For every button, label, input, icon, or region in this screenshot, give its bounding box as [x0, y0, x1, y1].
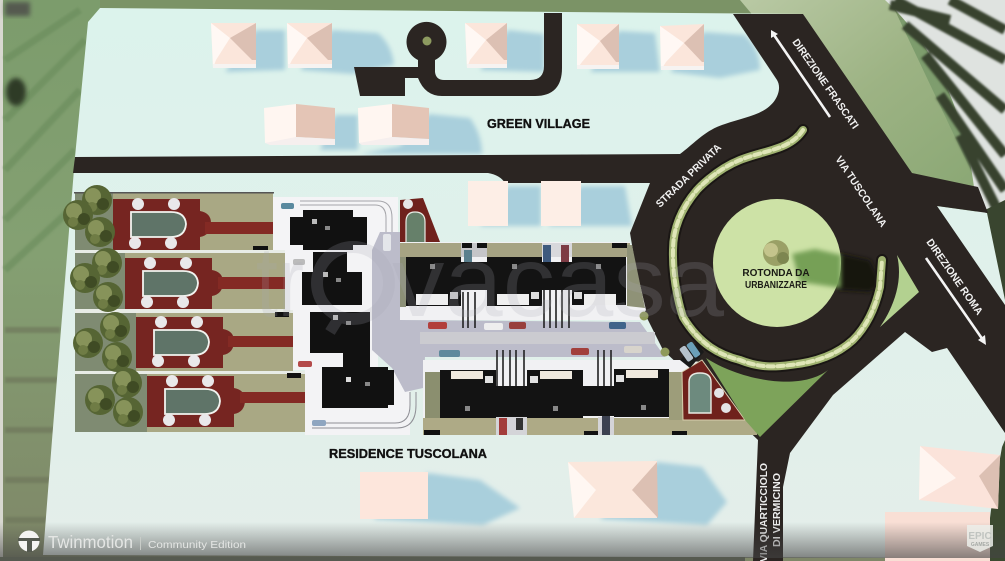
west roofs: [290, 210, 394, 408]
stairs: [463, 290, 569, 328]
house east 1: [919, 446, 1000, 509]
house 6: [264, 104, 335, 145]
bottom edge strip: [0, 557, 745, 561]
roundabout hedge: [673, 130, 882, 366]
north terrace block: [400, 242, 646, 328]
label: Rotonda da urbanizzare: ROTONDA DA: [742, 268, 810, 279]
label: Green Village: GREEN VILLAGE: [487, 116, 590, 131]
south-east corner pool: [682, 360, 745, 420]
road shadow of tree: [838, 253, 882, 292]
south terrace block: [423, 350, 757, 435]
south roofs: [440, 369, 669, 418]
house 5: [660, 24, 704, 70]
house east 2: [885, 512, 990, 561]
roundabout green centre: [713, 199, 841, 327]
label: Strada Privata: STRADA PRIVATA: [654, 142, 724, 210]
logo: Twinmotion: Community Edition: [148, 539, 246, 551]
roundabout centre tree spot: [422, 36, 432, 46]
green verge south of roundabout: [706, 358, 828, 437]
tree shadow on roundabout: [792, 249, 841, 288]
logo: Twinmotion: [18, 530, 246, 552]
house 2: [287, 23, 332, 68]
watermark: trovacasa: vacasa: [392, 226, 724, 338]
house south 1: [360, 472, 428, 519]
logo: Twinmotion: Twinmotion: [48, 532, 133, 552]
label: Via Quarticciolo di Vermicino: VIA QUARTICCIOLO: [758, 463, 770, 561]
cul-de-sac road Green Village: [354, 13, 562, 96]
north-east corner pool: [400, 198, 440, 258]
label: Rotonda da urbanizzare: [742, 268, 810, 291]
label: Rotonda da urbanizzare: URBANIZZARE: [745, 280, 807, 291]
logo: Epic Games badge: GAMES: [971, 542, 990, 548]
stairs: [497, 350, 611, 386]
house row: Green Village pyramids: [211, 23, 704, 226]
house shadows: [225, 30, 760, 525]
internal driveway: [372, 232, 665, 392]
small patios: [253, 246, 268, 250]
house south 2: [568, 461, 658, 518]
green wedge east of roundabout: [880, 255, 919, 327]
house 8: [468, 181, 508, 226]
house 1: [211, 23, 256, 68]
houses south: [360, 446, 1000, 561]
watermark: trovacasa: tr: [256, 226, 304, 338]
house 7: [358, 104, 429, 145]
bottom vignette: [0, 522, 1005, 558]
arrow: towards Roma: [926, 258, 986, 345]
garden row 2: [125, 257, 223, 309]
arrow: towards Frascati: [771, 30, 830, 117]
label: Residence Tuscolana: RESIDENCE TUSCOLANA: [329, 446, 488, 461]
trees along west boundary: [63, 185, 143, 427]
small trees at road edge: [640, 312, 670, 356]
label: Via Quarticciolo di Vermicino: DI VERMICINO: [771, 473, 783, 547]
roundabout tree: [763, 240, 789, 266]
house 3: [465, 23, 507, 68]
south parking bays: [496, 417, 527, 435]
parking bays: [461, 243, 487, 257]
label: Via Quarticciolo di Vermicino: [758, 463, 783, 561]
logo: Epic Games badge: EPIC: [968, 531, 992, 542]
north roofs: [406, 257, 626, 306]
label: Direzione Frascati: DIREZIONE FRASCATI: [790, 37, 861, 131]
garden row 3: [136, 316, 234, 368]
watermark: trovacasa: [256, 226, 724, 338]
garden row 1: [113, 198, 211, 250]
house 4: [577, 24, 619, 69]
label: Via Tuscolana: VIA TUSCOLANA: [833, 154, 889, 230]
label: Direzione Roma: DIREZIONE ROMA: [924, 237, 985, 318]
parked cars: [281, 203, 704, 426]
logo: Epic Games badge: [967, 525, 993, 552]
house 9: [541, 181, 581, 226]
garden row 4: [147, 375, 245, 427]
west villas: white bases, driveway and black roofs: [253, 197, 665, 435]
plot: residence gardens: [74, 192, 305, 432]
